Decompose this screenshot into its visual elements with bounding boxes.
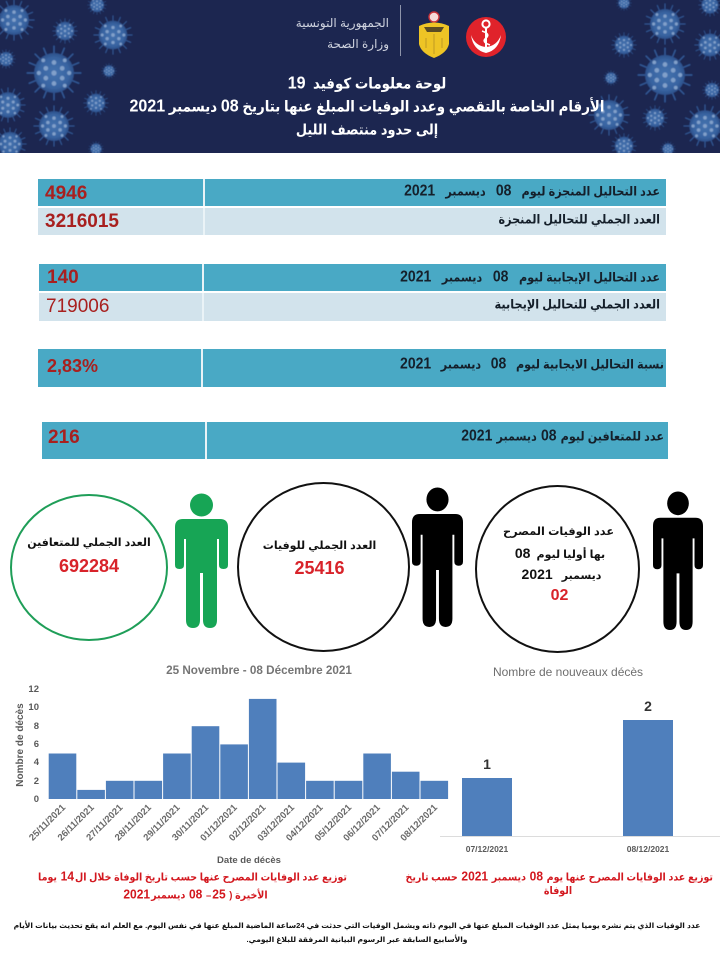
x axis date labels: 04/12/2021 [284,802,326,844]
panel: total positive tests: 719006 [46,296,109,317]
circle: total deaths: العدد الجملي للوفيات [263,540,376,552]
panel: total positive tests [39,293,666,321]
panel: positive tests today: 140 [47,267,79,288]
x axis date labels: 07/12/2021 [370,802,412,844]
circle: new deaths reported: 02 [551,587,568,604]
icon: black person [653,492,703,630]
data labels: 1 [483,756,491,772]
x axis date labels: 08/12/2021 [399,802,440,844]
icon: Tunisian coat of arms shield [419,12,449,58]
x axis title: Date de décès [217,855,281,866]
title: إلى حدود منتصف الليل [296,121,438,138]
title: لوحة معلومات كوفيد 19 [288,74,446,93]
panel: recovered today: 216 [48,427,80,448]
y axis labels: 12 [28,684,39,695]
circle: total recovered [10,494,168,641]
y axis labels: 4 [34,757,40,768]
panel: tests done today: 4946 [45,183,87,204]
caption: daily distribution [406,868,713,898]
y axis title: Nombre de décès [15,703,26,787]
circle: total recovered: العدد الجملي للمتعافين [27,537,151,549]
date labels: 07/12/2021 [466,844,509,854]
icon: black person [412,488,463,627]
panel: total tests done [38,208,666,235]
circle: new deaths reported: عدد الوفيات المصرح [503,526,614,538]
data labels: 2 [644,698,652,714]
ministry name text: وزارة الصحة [327,37,389,51]
date labels: 08/12/2021 [627,844,670,854]
x axis date labels: 29/11/2021 [141,802,183,843]
x axis date labels: 27/11/2021 [84,802,126,843]
x axis date labels: 03/12/2021 [256,802,297,844]
bar 08/12/2021 [623,720,673,836]
panel: recovered today [42,422,668,459]
panel: tests done today [38,179,666,206]
x axis date labels: 25/11/2021 [27,802,69,843]
panel: positivity rate: نسبة التحاليل الايجابية ليوم 08 ديسمبر 2021 [400,354,664,372]
chart title: Nombre de nouveaux décès [493,665,643,679]
caption: 14 day distribution [38,868,347,902]
x axis date labels: 30/11/2021 [170,802,212,843]
y axis labels: 0 [34,794,39,805]
x axis date labels: 28/11/2021 [113,802,154,843]
data labels [483,698,652,772]
ministry name text: الجمهورية التونسية [296,16,389,30]
bars [49,699,448,799]
x axis date labels: 06/12/2021 [341,802,383,844]
panel: positivity rate: 2,83% [47,356,98,376]
header banner [0,0,720,153]
circle: new deaths reported: ديسمبر 2021 [522,566,601,582]
y axis labels: 8 [34,721,39,732]
chart title: 25 Novembre - 08 Décembre 2021 [166,664,352,677]
panel: positive tests today [39,264,666,291]
y axis labels: 10 [28,702,39,713]
bar chart: new deaths [440,665,720,854]
caption: 14 day distribution: الأخيرة ( 25– 08 ديسمبر2021 [123,886,268,902]
x axis date labels: 02/12/2021 [227,802,269,844]
x axis date labels: 05/12/2021 [313,802,355,844]
caption: daily distribution: الوفاة [544,885,572,898]
panel: total tests done: 3216015 [45,211,119,232]
ministry name text [296,16,389,51]
x axis date labels: 26/11/2021 [56,802,97,843]
circle: total recovered: 692284 [59,556,119,576]
y axis labels: 2 [34,776,39,787]
footnote: عدد الوفيات الذي يتم نشره يوميا يمثل عدد الوفيات المبلغ عنها في اليوم ذاته ويشمل الوفيات التي حدثت في 24ساعة الماضية المبلغ عنها في نفس اليوم. مع العلم انه يقع تحديث بيانات الأيام [14,921,700,930]
panel: tests done today: عدد التحاليل المنجزة ليوم 08 ديسمبر 2021 [404,181,660,199]
x axis date labels [27,802,440,844]
panel: total tests done: العدد الجملي للتحاليل المنجزة [499,213,660,227]
panel: recovered today: عدد للمتعافين ليوم 08 ديسمبر 2021 [461,426,664,444]
icon: green person [175,494,228,628]
date labels [466,844,670,854]
circle: new deaths reported: بها أوليا ليوم 08 [515,545,605,561]
footnote: والأسابيع السابقة عبر الرسوم البيانية المرفقة للبلاغ اليومي. [247,935,467,944]
bar chart: deaths by date, 25 Nov - 08 Dec [15,664,448,866]
bar 07/12/2021 [462,778,512,836]
icon: ministry crescent and anchor logo [466,17,506,57]
circle: total deaths: 25416 [294,558,345,578]
title [130,74,604,138]
circle: new deaths reported [475,485,640,653]
caption: 14 day distribution: توزيع عدد الوفايات المصرح عنها حسب تاريخ الوفاة خلال ال14 يوما [38,868,347,884]
y axis labels [28,684,40,805]
title: الأرقام الخاصة بالتقصي وعدد الوفيات المبلغ عنها بتاريخ 08 ديسمبر 2021 [130,97,604,116]
panel: total positive tests: العدد الجملي للتحاليل الإيجابية [494,298,660,312]
x axis date labels: 01/12/2021 [198,802,240,844]
footnote [14,920,700,944]
panel: positive tests today: عدد التحاليل الإيجابية ليوم 08 ديسمبر 2021 [400,267,660,285]
circle: total deaths [237,482,410,652]
panel: positivity rate [38,349,666,387]
y axis labels: 6 [34,739,39,750]
caption: daily distribution: توزيع عدد الوفايات المصرح عنها يوم 08 ديسمبر 2021 حسب تاريخ [406,868,713,884]
